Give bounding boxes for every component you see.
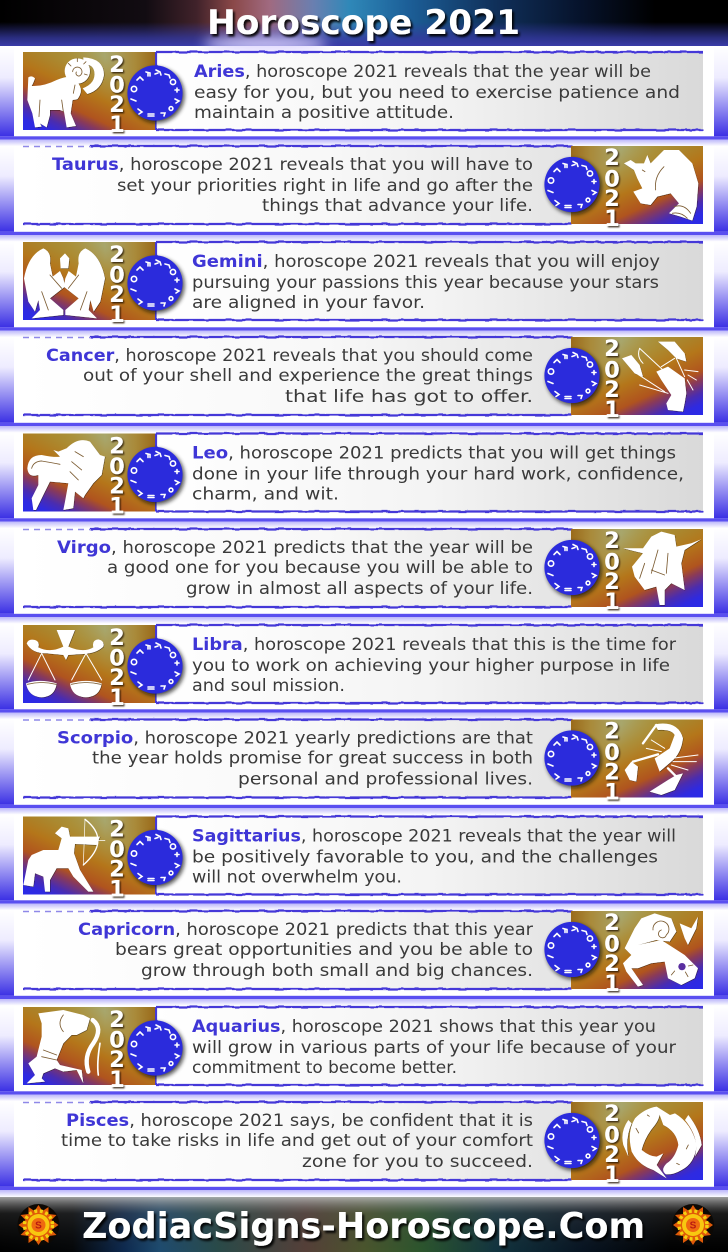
Aries text: Aries, horoscope 2021 reveals that the year will be [194, 62, 651, 82]
text background [23, 720, 572, 798]
icon: left sun emblem [18, 1204, 60, 1246]
year 2021: 2 [109, 665, 125, 691]
year 2021: 2 [109, 52, 125, 78]
title: Horoscope 2021 [207, 3, 520, 43]
panel: Gemini [23, 242, 703, 328]
panel: Aries [23, 52, 703, 138]
year 2021: 2 [604, 569, 620, 595]
panel: Pisces [23, 1101, 703, 1188]
Pisces text [61, 1111, 533, 1172]
panel: Sagittarius [23, 816, 703, 902]
panel: Libra [23, 625, 703, 711]
Aquarius text: will grow in various parts of your life because of your [192, 1038, 676, 1058]
year 2021: 2 [109, 625, 125, 651]
year 2021: 0 [109, 646, 125, 672]
Capricorn text [78, 920, 533, 981]
year 2021: 0 [604, 550, 620, 576]
Scorpio text [57, 728, 533, 790]
year 2021: 1 [109, 494, 125, 520]
website name: ZodiacSigns-Horoscope.Com [82, 1206, 645, 1247]
year 2021: 0 [109, 1028, 125, 1054]
icon: zodiac wheel [127, 830, 184, 887]
icon: Sagittarius archer [23, 819, 105, 892]
Gemini text: pursuing your passions this year because your stars [192, 273, 659, 293]
year 2021: 2 [109, 474, 125, 500]
Virgo text: a good one for you because you will be able to [107, 558, 533, 578]
text background [23, 146, 572, 224]
year 2021: 2 [604, 528, 620, 554]
Virgo text: Virgo, horoscope 2021 predicts that the year will be [57, 538, 533, 558]
year 2021: 0 [109, 262, 125, 288]
Gemini text [192, 252, 660, 313]
icon: zodiac wheel [544, 730, 601, 788]
icon: Leo lion [27, 440, 105, 510]
year 2021 [109, 816, 125, 902]
icon: zodiac wheel [544, 348, 601, 405]
year 2021: 2 [109, 434, 125, 460]
icon: Scorpio scorpion [625, 724, 698, 795]
year 2021 [604, 718, 620, 806]
image background [571, 146, 703, 224]
year 2021: 0 [604, 1122, 620, 1148]
year 2021: 0 [604, 166, 620, 192]
text background [23, 911, 572, 989]
Pisces text: zone for you to succeed. [302, 1152, 533, 1172]
year 2021 [604, 145, 620, 232]
Leo text: charm, and wit. [192, 484, 339, 504]
text background [155, 242, 703, 320]
Aries text [194, 62, 680, 123]
icon: zodiac wheel [127, 638, 184, 696]
Virgo text: grow in almost all aspects of your life. [186, 579, 533, 599]
Cancer text: out of your shell and experience the great things [83, 366, 533, 386]
panel: Virgo [23, 528, 703, 615]
Cancer text: Cancer, horoscope 2021 reveals that you should come [46, 346, 533, 366]
Pisces text: Pisces, horoscope 2021 says, be confident that it is [66, 1111, 533, 1131]
icon: zodiac wheel [544, 540, 601, 597]
year 2021: 1 [109, 1067, 125, 1093]
icon: Libra scales [26, 630, 104, 697]
Sagittarius text: will not overwhelm you. [192, 868, 402, 888]
Pisces text: time to take risks in life and get out of your comfort [61, 1131, 533, 1151]
year 2021: 1 [604, 589, 620, 615]
Sagittarius text [192, 826, 676, 888]
Gemini text: are aligned in your favor. [192, 293, 425, 313]
year 2021: 2 [604, 1142, 620, 1168]
year 2021 [109, 434, 125, 520]
text background [155, 816, 703, 894]
image background [23, 52, 155, 130]
icon: Aries ram [27, 57, 104, 127]
year 2021 [604, 336, 620, 423]
Sagittarius text: be positively favorable to you, and the challenges [192, 848, 658, 868]
year 2021: 2 [604, 145, 620, 171]
icon: Pisces fish [622, 1107, 702, 1178]
year 2021: 2 [604, 336, 620, 362]
image background [23, 242, 155, 320]
image background [23, 816, 155, 894]
year 2021: 2 [604, 377, 620, 403]
year 2021: 1 [604, 780, 620, 806]
Libra text: and soul mission. [192, 676, 345, 696]
icon: zodiac wheel [127, 447, 184, 504]
panel: Aquarius [23, 1007, 703, 1093]
text background [155, 625, 703, 703]
Scorpio text: personal and professional lives. [238, 770, 533, 790]
Aquarius text: Aquarius, horoscope 2021 shows that this year you [192, 1017, 656, 1037]
text background [23, 529, 572, 607]
Leo text: done in your life through your hard work, confidence, [192, 464, 684, 484]
year 2021: 1 [109, 112, 125, 138]
image background [571, 529, 703, 607]
year 2021 [604, 1101, 620, 1188]
Scorpio text: Scorpio, horoscope 2021 yearly predictions are that [57, 728, 533, 748]
Cancer text [46, 346, 533, 407]
Aries text: maintain a positive attitude. [194, 103, 454, 123]
Leo text: Leo, horoscope 2021 predicts that you will get things [192, 444, 676, 464]
icon: Gemini twins [24, 248, 105, 318]
year 2021: 2 [604, 718, 620, 744]
icon: zodiac wheel [127, 255, 184, 313]
Aquarius text: commitment to become better. [192, 1058, 457, 1078]
Libra text: Libra, horoscope 2021 reveals that this is the time for [192, 635, 676, 655]
text background [23, 337, 572, 415]
year 2021 [109, 625, 125, 711]
year 2021: 2 [109, 1047, 125, 1073]
image background [23, 1007, 155, 1085]
Libra text [192, 635, 676, 696]
Cancer text: that life has got to offer. [285, 387, 533, 407]
year 2021: 0 [109, 72, 125, 98]
year 2021: 0 [109, 837, 125, 863]
year 2021: 1 [109, 685, 125, 711]
panel: Capricorn [23, 910, 703, 997]
Taurus text [52, 155, 533, 216]
text background [155, 1007, 703, 1085]
panel: Taurus [23, 145, 703, 232]
icon: Aquarius water bearer [27, 1010, 100, 1083]
year 2021: 2 [109, 1007, 125, 1033]
Capricorn text: Capricorn , horoscope 2021 predicts that this year [78, 920, 533, 940]
year 2021: 2 [109, 816, 125, 842]
year 2021: 2 [604, 760, 620, 786]
Taurus text: Taurus, horoscope 2021 reveals that you will have to [52, 155, 533, 175]
icon: Virgo maiden [623, 532, 701, 605]
year 2021 [604, 528, 620, 615]
Taurus text: set your priorities right in life and go after the [117, 176, 533, 196]
year 2021: 2 [109, 242, 125, 268]
icon: Capricorn sea-goat [623, 913, 698, 987]
Taurus text: things that advance your life. [262, 196, 533, 216]
panel: Leo [23, 434, 703, 520]
icon: zodiac wheel [127, 1020, 184, 1078]
year 2021 [109, 242, 125, 328]
Leo text [192, 444, 684, 504]
Sagittarius text: Sagittarius, horoscope 2021 reveals that the year will [192, 826, 676, 846]
year 2021: 2 [109, 92, 125, 118]
icon: right sun emblem [672, 1204, 714, 1246]
year 2021: 2 [604, 1101, 620, 1127]
year 2021: 1 [604, 206, 620, 232]
icon: zodiac wheel [544, 157, 601, 214]
Scorpio text: the year holds promise for great success in both [92, 748, 533, 768]
icon: zodiac wheel [544, 922, 601, 979]
year 2021: 0 [604, 932, 620, 958]
icon: Cancer crab [622, 342, 698, 412]
year 2021: 1 [109, 302, 125, 328]
image background [23, 625, 155, 703]
Libra text: you to work on achieving your higher purpose in life [192, 656, 670, 676]
text background [155, 52, 703, 130]
year 2021: 2 [109, 856, 125, 882]
year 2021: 0 [604, 740, 620, 766]
year 2021 [109, 1007, 125, 1093]
icon: Taurus bull [624, 150, 698, 221]
year 2021: 2 [604, 186, 620, 212]
image background [571, 911, 703, 989]
year 2021 [604, 910, 620, 997]
Aries text: easy for you, but you need to exercise patience and [194, 83, 680, 103]
text background [155, 434, 703, 512]
Capricorn text: bears great opportunities and you be able to [115, 940, 533, 960]
year 2021: 1 [109, 876, 125, 902]
Capricorn text: grow through both small and big chances. [141, 961, 533, 981]
Aquarius text [192, 1017, 676, 1078]
year 2021: 0 [604, 358, 620, 384]
Gemini text: Gemini, horoscope 2021 reveals that you will enjoy [192, 252, 660, 272]
panel: Cancer [23, 336, 703, 423]
year 2021: 1 [604, 397, 620, 423]
icon: zodiac wheel [127, 65, 184, 123]
year 2021 [109, 52, 125, 138]
year 2021: 1 [604, 1162, 620, 1188]
year 2021: 1 [604, 971, 620, 997]
year 2021: 2 [604, 951, 620, 977]
header banner [0, 0, 728, 52]
year 2021: 2 [109, 282, 125, 308]
image background [23, 434, 155, 512]
Virgo text [57, 538, 533, 599]
image background [571, 720, 703, 798]
year 2021: 0 [109, 454, 125, 480]
text background [23, 1102, 572, 1180]
image background [571, 337, 703, 415]
year 2021: 2 [604, 910, 620, 936]
image background [571, 1102, 703, 1180]
footer banner [0, 1197, 728, 1252]
panel: Scorpio [23, 718, 703, 806]
icon: zodiac wheel [544, 1113, 601, 1170]
